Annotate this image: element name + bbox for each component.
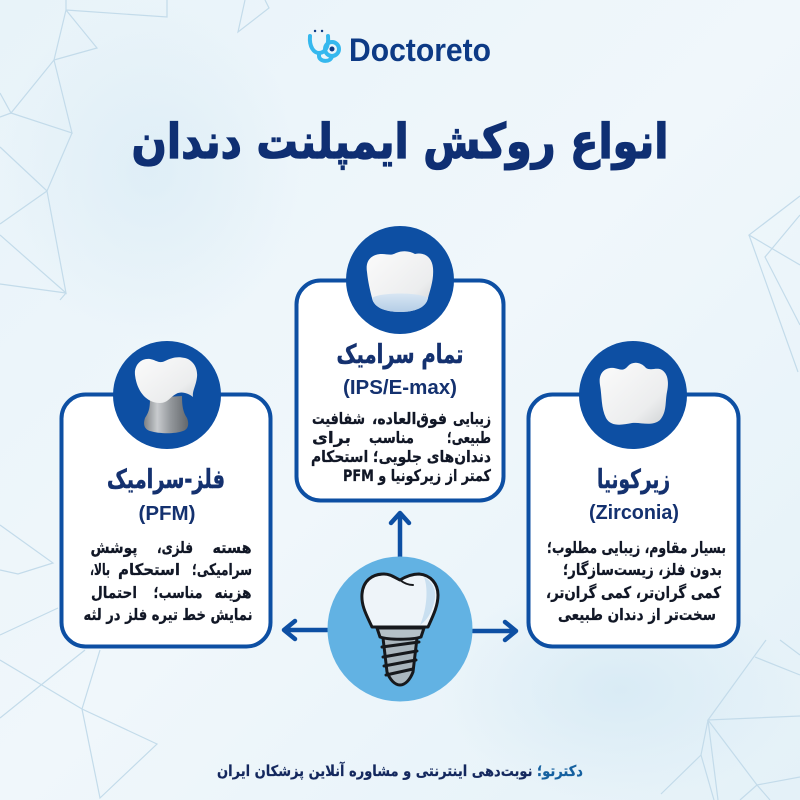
text block: IPS/E-max description: برای <box>312 428 351 447</box>
logo: Doctoreto <box>310 31 491 68</box>
heading: IPS/E-max: تمام سرامیک <box>336 340 464 370</box>
icon circle: ceramic crown <box>346 226 454 334</box>
text block: Zirconia description: کمی گران‌تر، کمی گران‌تر، <box>546 583 722 602</box>
icon: stethoscope <box>310 31 339 61</box>
arrow: up <box>391 513 409 557</box>
center hub arrows <box>284 513 516 640</box>
text block: PFM description: فلزی، <box>157 538 193 557</box>
text block: Zirconia description: بسیار مقاوم، زیبایی مطلوب؛ <box>547 538 726 557</box>
text block: Zirconia description: سخت‌تر از دندان طبیعی <box>558 605 716 624</box>
text block: Zirconia description <box>546 538 726 624</box>
heading: Zirconia: زیرکونیا <box>597 465 670 495</box>
heading: PFM: فلز-سرامیک <box>107 465 225 495</box>
implant screw <box>377 628 424 685</box>
logo wordmark: Doctoreto <box>349 32 491 68</box>
text block: IPS/E-max description: فوق‌العاده، <box>372 409 447 428</box>
text block: PFM description: نمایش خط تیره فلز در لثه <box>84 605 252 624</box>
text block: PFM description <box>84 538 252 624</box>
panel: Zirconia <box>528 341 738 646</box>
text block: IPS/E-max description: دندان‌های جلویی؛ استحکام <box>311 447 491 466</box>
arrow: right <box>473 622 516 640</box>
panel: IPS/E-max <box>296 226 504 500</box>
text block: PFM description: هسته <box>212 538 252 557</box>
text block: IPS/E-max description: زیبایی <box>453 409 491 428</box>
text block: Zirconia description: بدون فلز، زیست‌سازگار؛ <box>563 560 722 579</box>
text block: IPS/E-max description: مناسب <box>369 428 414 447</box>
text block: PFM description: مناسب؛ <box>154 583 202 602</box>
implant crown <box>362 574 438 627</box>
text block: PFM description: بالا، <box>90 560 110 579</box>
text block: PFM description: احتمال <box>91 583 137 602</box>
text block: PFM description: استحکام <box>118 560 180 579</box>
icon circle: PFM crown <box>113 341 221 449</box>
text block: PFM description: هزینه <box>214 583 252 602</box>
subtitle: PFM: (PFM) <box>138 503 196 525</box>
text block: IPS/E-max description: طبیعی؛ <box>447 428 491 447</box>
subtitle: Zirconia: (Zirconia) <box>589 502 679 524</box>
subtitle: IPS/E-max: (IPS/E-max) <box>343 377 457 399</box>
panel: PFM <box>62 341 270 646</box>
text block: IPS/E-max description: کمتر از زیرکونیا و PFM <box>343 466 492 485</box>
text block: PFM description: پوشش <box>90 538 138 558</box>
arrow: left <box>284 621 327 639</box>
text block: PFM description: سرامیکی؛ <box>192 560 252 579</box>
text block: IPS/E-max description: شفافیت <box>312 409 365 428</box>
central implant icon <box>328 556 472 702</box>
text block: IPS/E-max description <box>311 409 492 485</box>
footer: دکترتو؛ نوبت‌دهی اینترنتی و مشاوره آنلاین پزشکان ایران <box>217 762 583 781</box>
icon circle: zirconia crown <box>579 341 687 449</box>
title: انواع روکش ایمپلنت دندان <box>132 114 668 170</box>
